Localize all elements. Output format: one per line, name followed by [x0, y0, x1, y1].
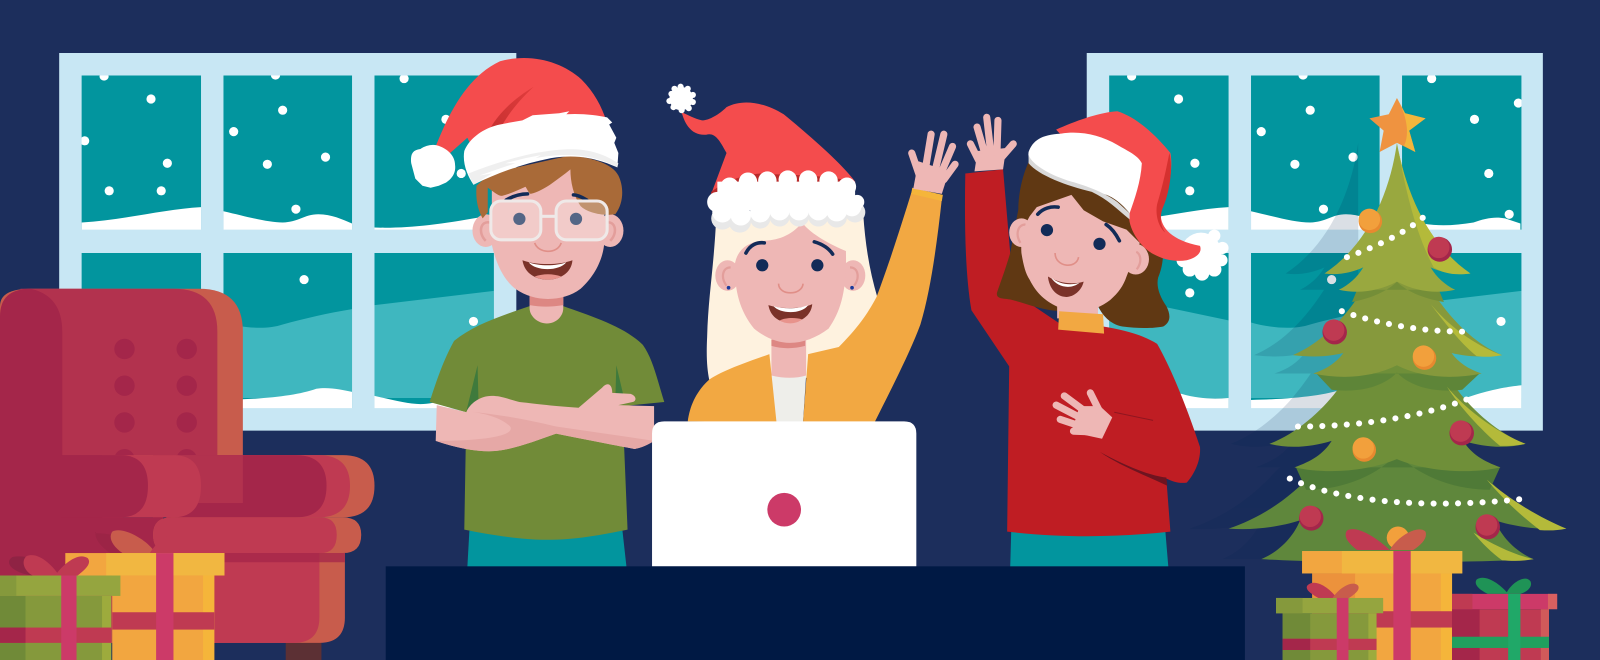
woman: santa hat — [682, 102, 855, 194]
red sweater woman: eyes and brows — [1038, 207, 1119, 250]
red sweater woman: raised hand — [970, 117, 1013, 171]
tree: top tier — [1324, 143, 1470, 292]
woman: neck — [771, 337, 806, 378]
man: crossed arms — [436, 384, 654, 451]
tree: bottom tier — [1229, 429, 1566, 562]
gift: large yellow, right — [1302, 529, 1462, 660]
tree: third tier — [1269, 306, 1526, 471]
man: mouth — [522, 260, 572, 280]
tree: right-side highlights — [1397, 143, 1566, 561]
christmas tree — [1190, 98, 1566, 562]
red sweater woman: ears — [1009, 218, 1149, 274]
woman: face — [735, 222, 846, 343]
man: t-shirt — [430, 306, 664, 540]
tree: light strings — [1290, 216, 1522, 504]
laptop — [652, 421, 916, 566]
woman: mouth — [768, 304, 812, 323]
left window — [59, 53, 516, 431]
woman: eyes and brows — [746, 242, 833, 271]
red sweater woman: face — [1021, 195, 1140, 312]
woman: raised hand — [912, 134, 955, 194]
man: head — [492, 168, 604, 299]
man: hat fur band — [464, 111, 618, 185]
red sweater woman: sweater — [965, 169, 1200, 536]
right window — [1087, 53, 1543, 431]
woman: hat fur trim — [711, 202, 865, 233]
woman: pompom — [666, 84, 696, 113]
gift: green, left — [0, 555, 120, 660]
gift: red, right — [1452, 578, 1557, 660]
laptop logo dot — [767, 493, 801, 527]
red sweater woman: chest hand — [1056, 393, 1112, 439]
person: woman in red sweater — [965, 111, 1229, 567]
red sweater woman: trousers — [1010, 531, 1168, 567]
man: glasses — [491, 201, 607, 240]
red sweater woman: collar — [1058, 311, 1104, 334]
man: eyes and brows — [506, 194, 587, 225]
red sweater woman: hat fur band — [1028, 133, 1142, 213]
gift: yellow, left — [65, 530, 224, 660]
red sweater woman: santa hat crown — [1056, 111, 1201, 261]
man: santa hat crown — [435, 58, 606, 163]
red sweater woman: nose — [1055, 253, 1079, 265]
woman: nose — [779, 284, 803, 293]
man: nose — [535, 243, 561, 251]
person: man in green shirt — [411, 58, 664, 567]
armchair — [0, 289, 374, 660]
tree: cast shadow — [1190, 143, 1358, 559]
man: pompom — [411, 145, 455, 188]
gift: green, right — [1276, 583, 1383, 660]
man: hair — [476, 155, 622, 218]
woman: white top — [770, 376, 806, 422]
person: woman in yellow jacket — [666, 84, 955, 422]
tree: second tier — [1293, 219, 1502, 377]
red sweater woman: hair — [997, 158, 1169, 328]
red sweater woman: hat back and pompom — [1177, 230, 1229, 281]
tree: baubles — [1299, 209, 1500, 549]
man: neck — [530, 291, 563, 323]
red sweater woman: neck — [1057, 302, 1098, 318]
woman: hair — [707, 214, 878, 388]
tree: star — [1369, 98, 1426, 152]
woman: yellow jacket and raised sleeve — [688, 190, 942, 422]
man: trousers — [467, 531, 627, 567]
man: ears — [472, 214, 623, 247]
red sweater woman: mouth — [1048, 277, 1084, 297]
desk — [386, 566, 1245, 660]
woman: ears — [715, 260, 865, 291]
woman: earrings — [727, 286, 854, 290]
